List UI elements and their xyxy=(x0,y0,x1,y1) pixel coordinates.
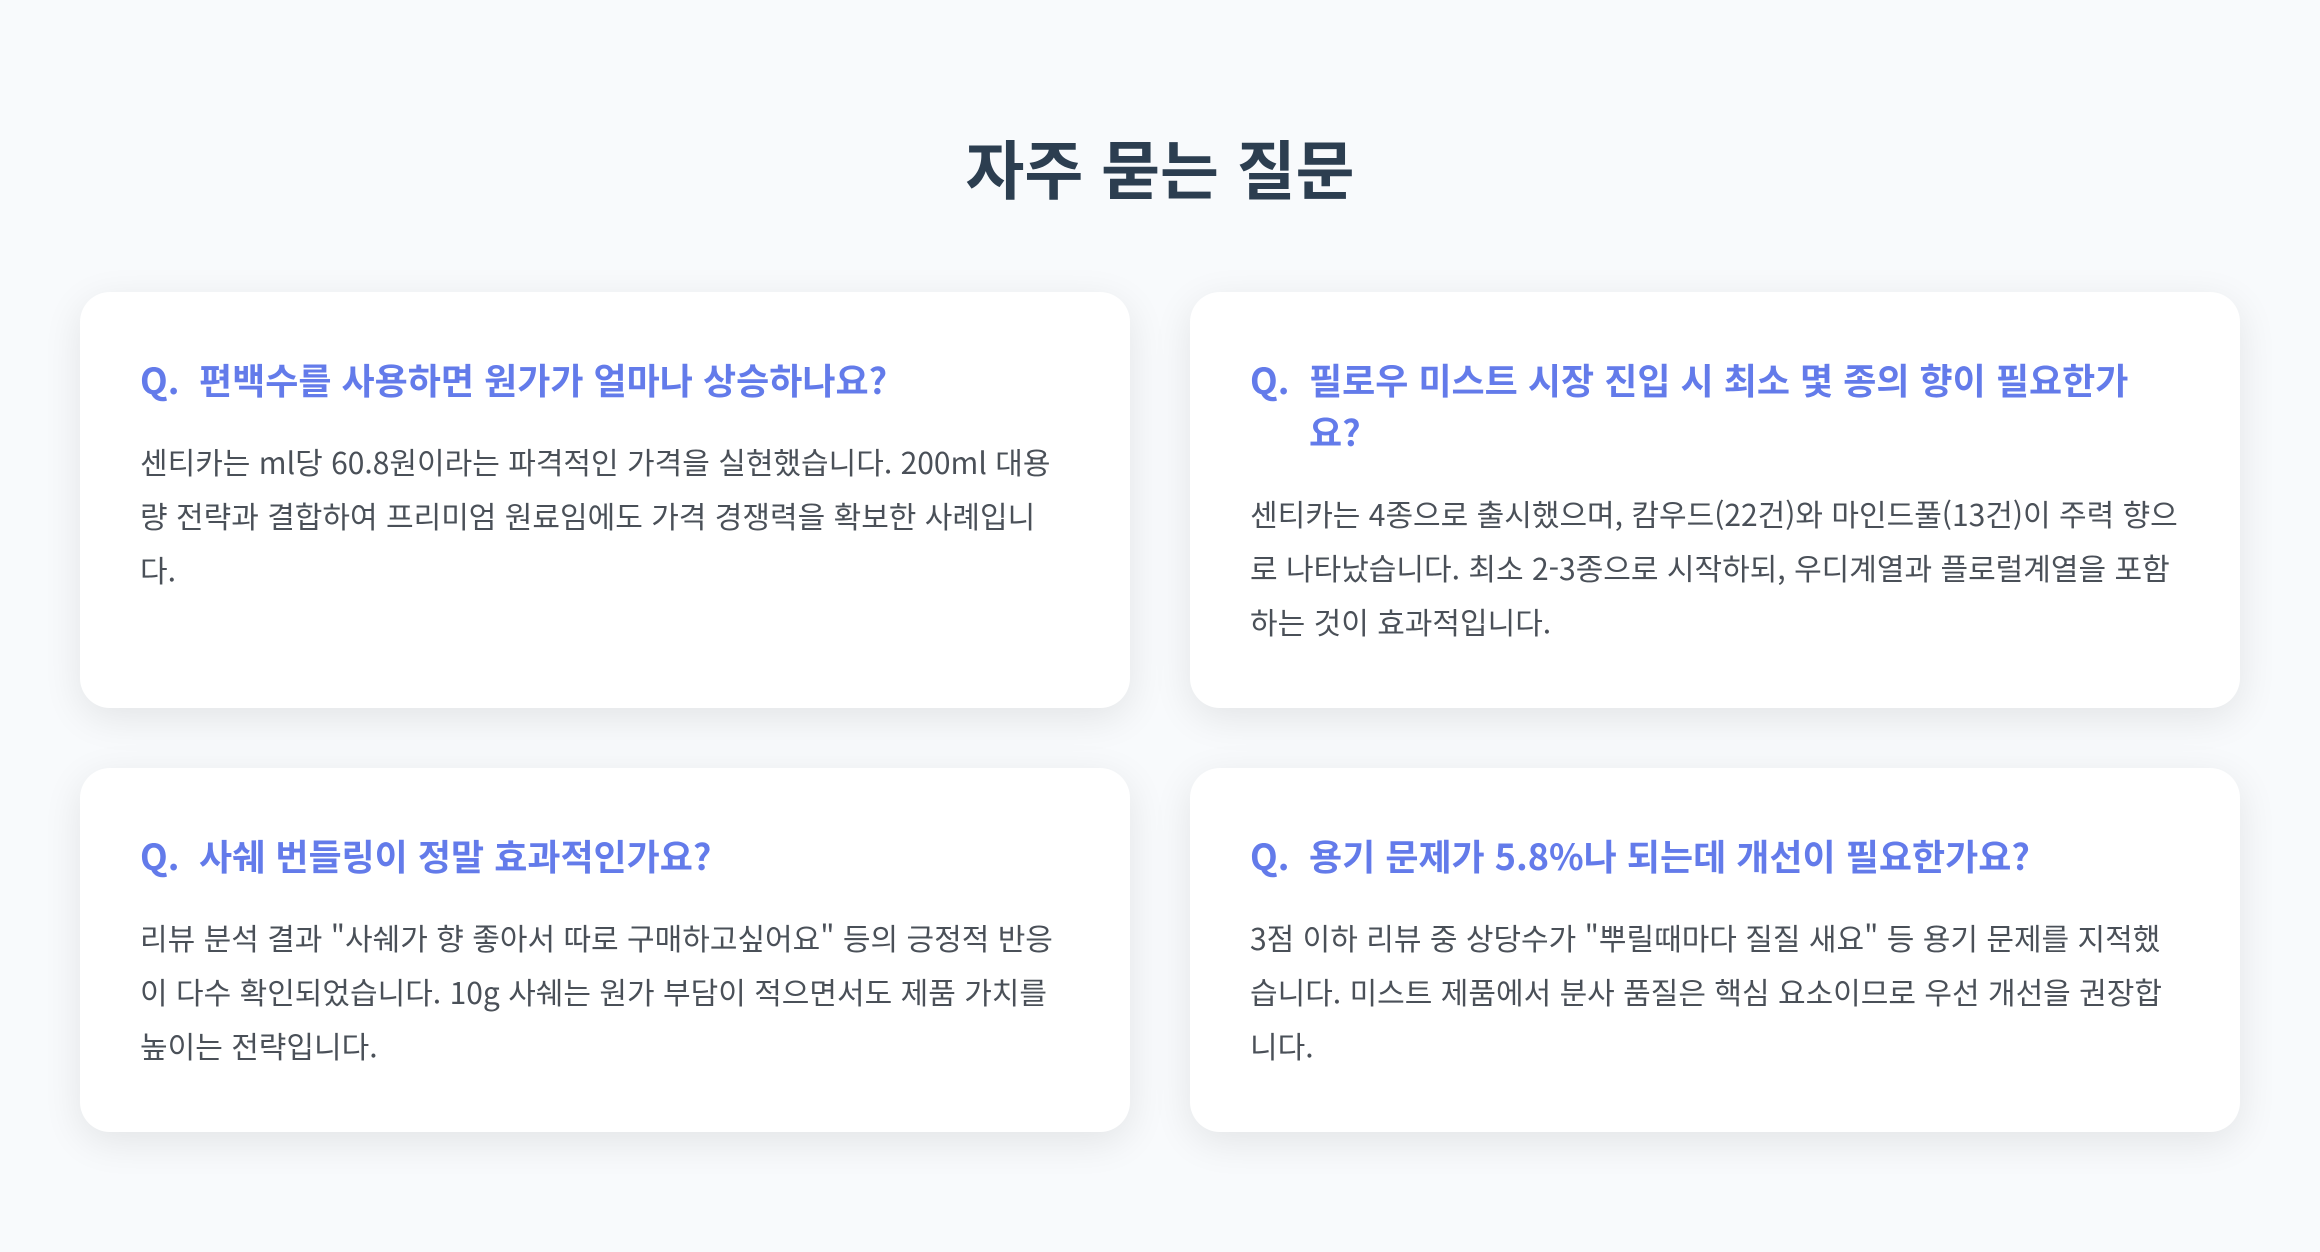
question 2: 요? xyxy=(1309,404,1361,456)
answer 3: 이 다수 확인되었습니다. 10g 사쉐는 원가 부담이 적으면서도 제품 가치를 xyxy=(140,969,1047,1013)
panel: FAQ 4 xyxy=(1190,768,2240,1132)
answer 1: 센티카는 ml당 60.8원이라는 파격적인 가격을 실현했습니다. 200ml 대용 xyxy=(140,439,1050,483)
question 4: 용기 문제가 5.8%나 되는데 개선이 필요한가요? xyxy=(1309,828,2030,880)
answer 3: 높이는 전략입니다. xyxy=(140,1023,378,1067)
panel: FAQ 1 xyxy=(80,292,1130,708)
question 1: Q. xyxy=(140,352,179,404)
title: 자주 묻는 질문 xyxy=(965,121,1355,213)
answer 4: 3점 이하 리뷰 중 상당수가 "뿌릴때마다 질질 새요" 등 용기 문제를 지적했 xyxy=(1250,915,2160,959)
answer 2: 센티카는 4종으로 출시했으며, 캄우드(22건)와 마인드풀(13건)이 주력 향으 xyxy=(1250,491,2178,535)
answer 3 xyxy=(140,915,1053,1067)
question 2: Q. xyxy=(1250,352,1289,404)
answer 1: 다. xyxy=(140,547,176,591)
question 3: Q. xyxy=(140,828,179,880)
question 1: 편백수를 사용하면 원가가 얼마나 상승하나요? xyxy=(199,352,887,404)
answer 3: 리뷰 분석 결과 "사쉐가 향 좋아서 따로 구매하고싶어요" 등의 긍정적 반응 xyxy=(140,915,1053,959)
answer 1: 량 전략과 결합하여 프리미엄 원료임에도 가격 경쟁력을 확보한 사례입니 xyxy=(140,493,1035,537)
question 3: 사쉐 번들링이 정말 효과적인가요? xyxy=(199,828,711,880)
question 2: 필로우 미스트 시장 진입 시 최소 몇 종의 향이 필요한가 xyxy=(1309,352,2128,404)
answer 1 xyxy=(140,439,1050,591)
panel: FAQ 3 xyxy=(80,768,1130,1132)
question 2 xyxy=(1250,352,2128,456)
answer 2: 하는 것이 효과적입니다. xyxy=(1250,599,1551,643)
panel: FAQ 2 xyxy=(1190,292,2240,708)
answer 4: 니다. xyxy=(1250,1023,1314,1067)
question 4: Q. xyxy=(1250,828,1289,880)
answer 2: 로 나타났습니다. 최소 2-3종으로 시작하되, 우디계열과 플로럴계열을 포함 xyxy=(1250,545,2170,589)
answer 4 xyxy=(1250,915,2162,1067)
answer 4: 습니다. 미스트 제품에서 분사 품질은 핵심 요소이므로 우선 개선을 권장합 xyxy=(1250,969,2162,1013)
answer 2 xyxy=(1250,491,2178,643)
